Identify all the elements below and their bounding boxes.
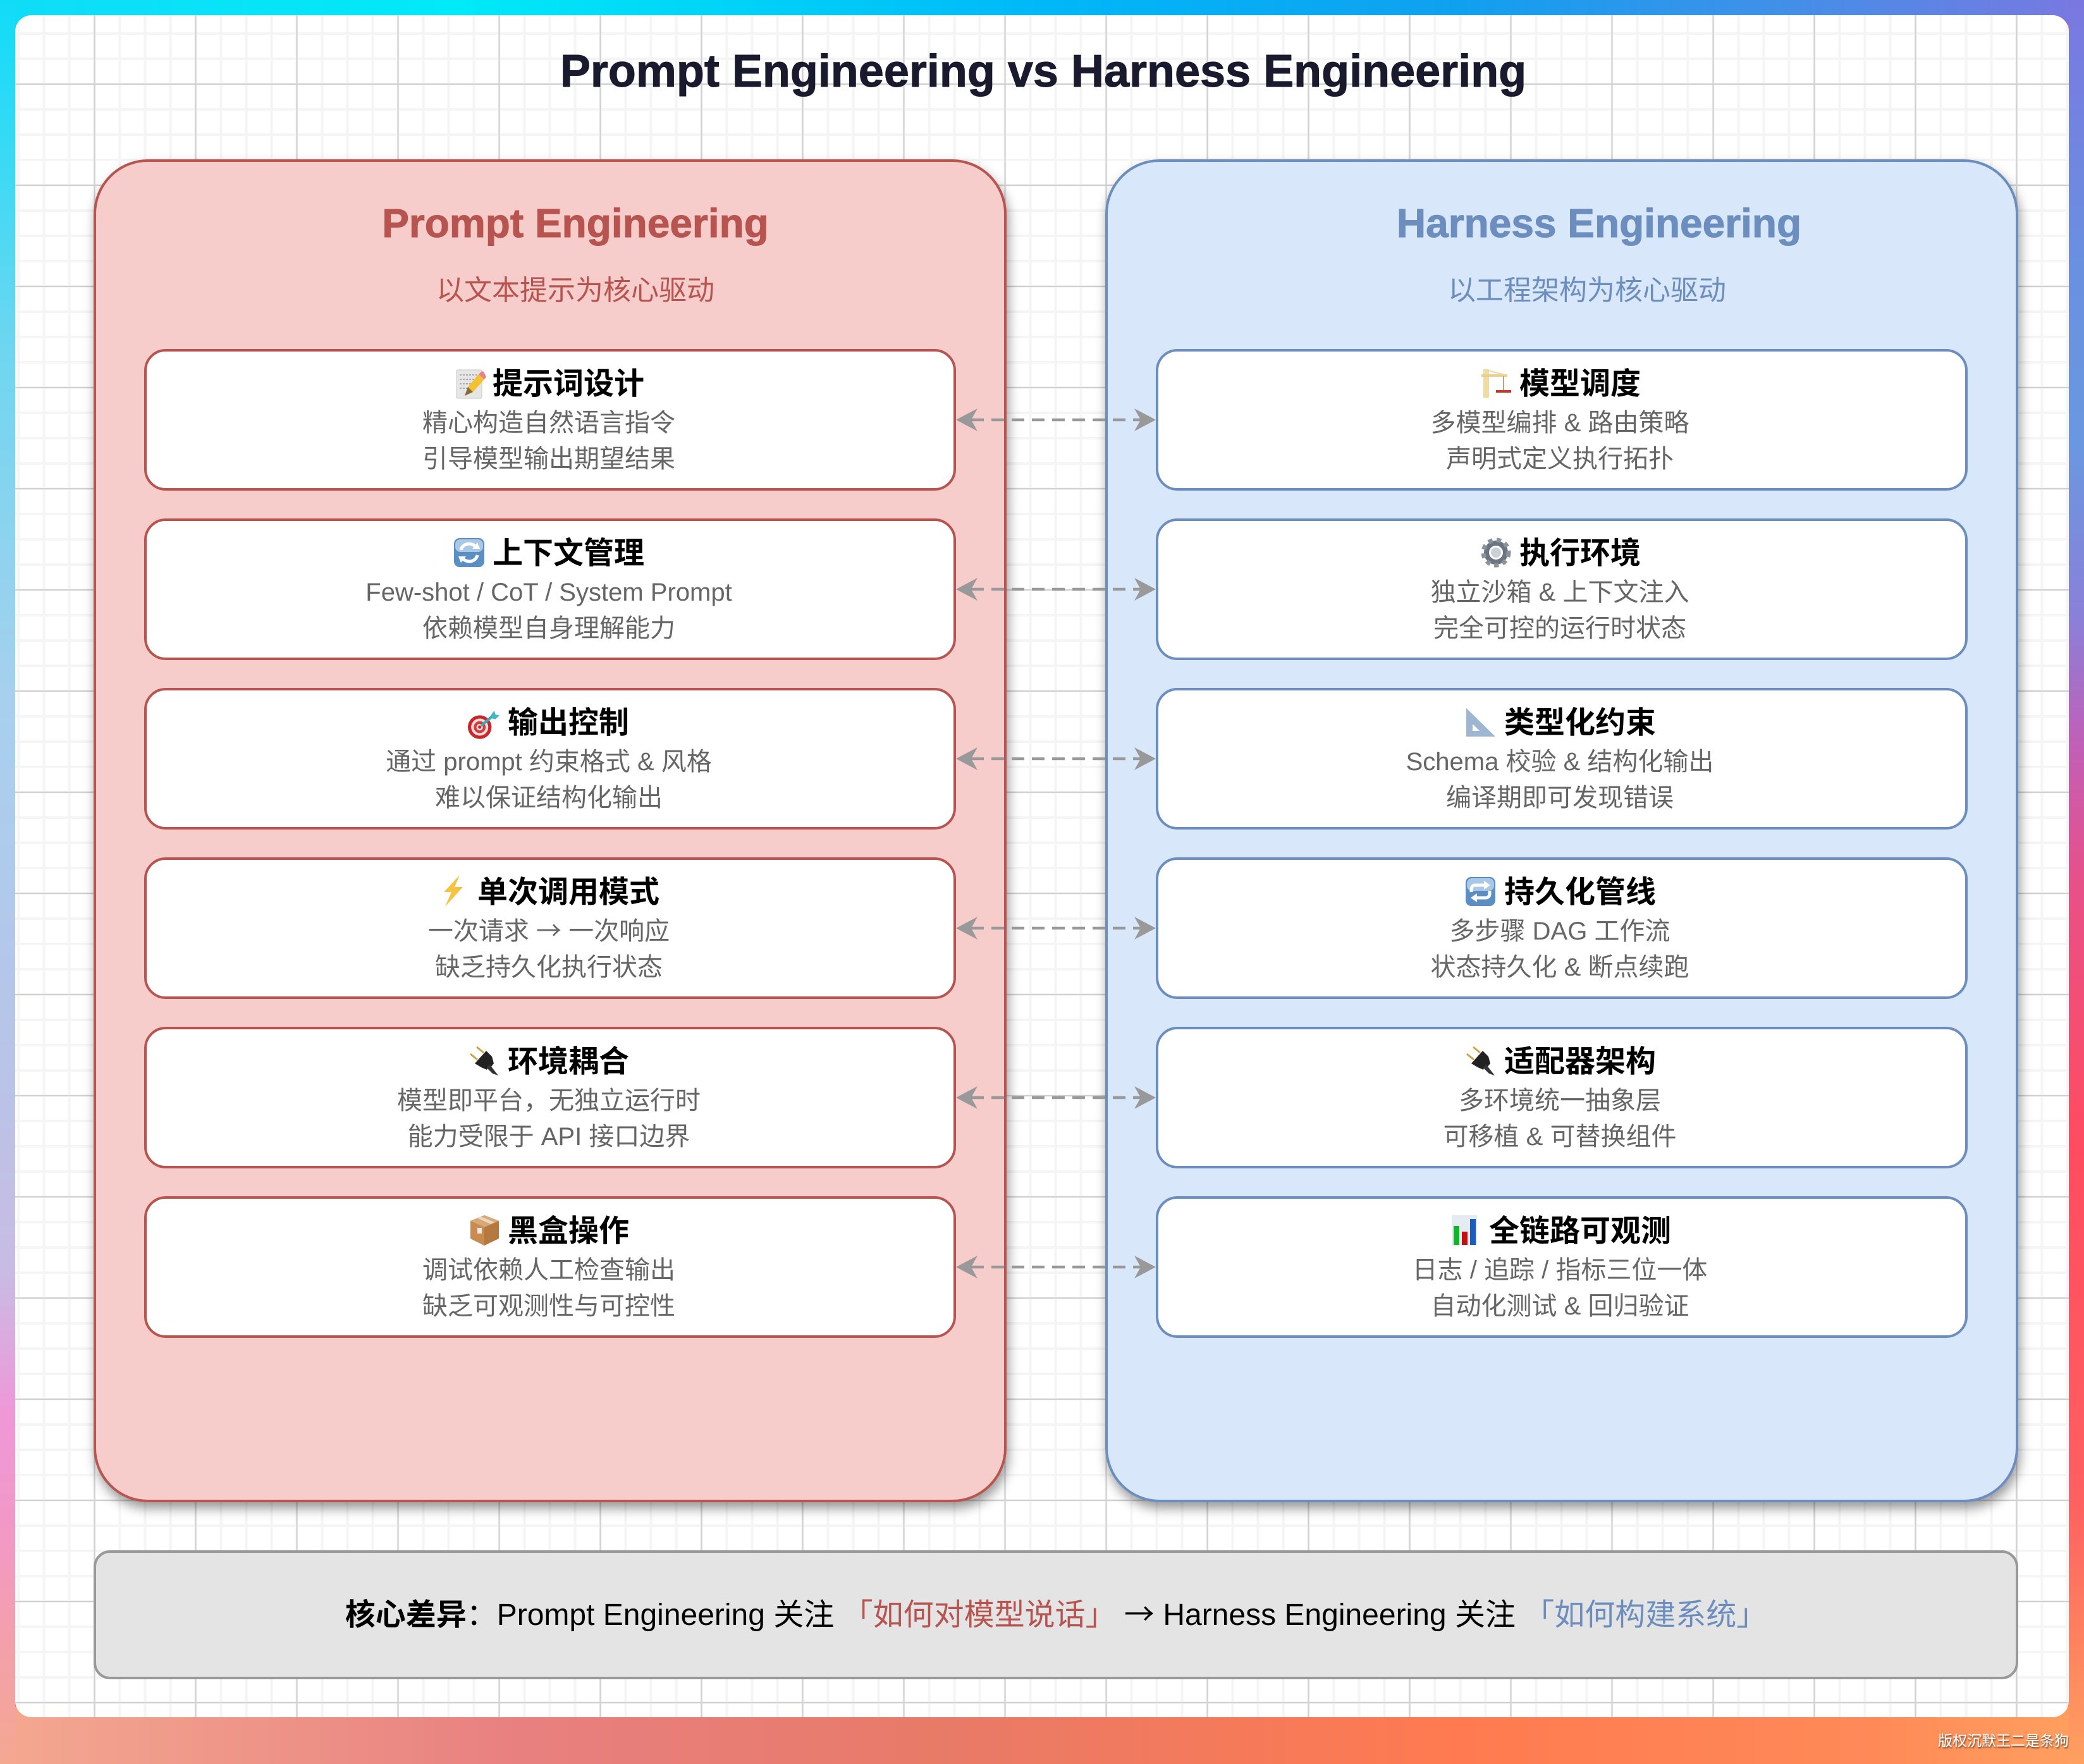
card description: [422, 409, 675, 473]
card description: 多步骤 DAG 工作流: [1450, 917, 1670, 945]
card description: [1406, 748, 1713, 812]
card description: 能力受限于 API 接口边界: [408, 1123, 690, 1151]
arrow: row 6: [956, 1256, 1156, 1278]
callout text: 核心差异：Prompt Engineering 关注 「如何对模型说话」 → Harness Engineering 关注 「如何构建系统」: [345, 1589, 1767, 1634]
card: 提示词设计: [145, 350, 955, 489]
icon: plug: [470, 1047, 498, 1075]
card description: [1443, 1087, 1676, 1151]
icon: refresh: [454, 538, 484, 567]
callout: core difference: [95, 1552, 2017, 1678]
card description: 精心构造自然语言指令: [422, 409, 675, 437]
icon: memo: [457, 370, 486, 398]
card description: 编译期即可发现错误: [1446, 784, 1674, 812]
card: 黑盒操作: [145, 1197, 955, 1337]
panel subtitle: left: 以文本提示为核心驱动: [436, 275, 714, 306]
card heading: 黑盒操作: [508, 1215, 629, 1248]
card description: 缺乏可观测性与可控性: [422, 1292, 675, 1320]
card description: [428, 910, 670, 981]
card: 上下文管理: [145, 520, 955, 659]
card description: 模型即平台，无独立运行时: [397, 1087, 701, 1115]
card: 适配器架构: [1157, 1028, 1966, 1167]
card heading: 上下文管理: [493, 537, 644, 570]
card description: 缺乏持久化执行状态: [435, 953, 663, 981]
card description: 一次请求 → 一次响应: [428, 910, 670, 947]
card description: [1431, 409, 1689, 473]
card heading: 适配器架构: [1504, 1045, 1656, 1079]
card description: 通过 prompt 约束格式 & 风格: [386, 748, 712, 776]
card description: [397, 1087, 701, 1151]
icon: bar chart: [1452, 1215, 1477, 1246]
title: Prompt Engineering vs Harness Engineering: [560, 46, 1526, 97]
icon: package: [470, 1215, 499, 1246]
card heading: 类型化约束: [1504, 706, 1656, 740]
panel subtitle: right: 以工程架构为核心驱动: [1448, 275, 1726, 306]
icon: triangle ruler: [1466, 708, 1495, 737]
card heading: 模型调度: [1519, 367, 1641, 401]
card description: 自动化测试 & 回归验证: [1431, 1292, 1689, 1320]
card description: 引导模型输出期望结果: [422, 445, 675, 473]
icon: lightning: [444, 875, 463, 907]
card description: [1431, 917, 1689, 981]
card description: 完全可控的运行时状态: [1433, 615, 1686, 642]
card description: [1431, 579, 1689, 642]
card: 输出控制: [145, 689, 955, 828]
card heading: 全链路可观测: [1489, 1215, 1671, 1248]
card description: 难以保证结构化输出: [435, 784, 663, 812]
card heading: 输出控制: [508, 706, 629, 740]
card: 环境耦合: [145, 1028, 955, 1167]
panel heading: Prompt Engineering: Prompt Engineering: [382, 200, 769, 246]
card: 持久化管线: [1157, 859, 1966, 998]
card description: [386, 748, 712, 812]
card heading: 持久化管线: [1504, 876, 1656, 909]
card: 全链路可观测: [1157, 1197, 1966, 1337]
icon: dart target: [468, 711, 500, 739]
card: 单次调用模式: [145, 859, 955, 998]
panel heading: Harness Engineering: Harness Engineering: [1397, 200, 1801, 246]
icon: plug: [1467, 1047, 1495, 1075]
icon: crane: [1481, 369, 1511, 398]
arrow: row 1: [956, 408, 1156, 431]
card heading: 环境耦合: [508, 1045, 629, 1079]
icon: repeat: [1466, 877, 1495, 906]
card description: [422, 1256, 675, 1320]
watermark: 版权沉默王二是条狗: [1938, 1732, 2069, 1749]
arrow: row 3: [956, 747, 1156, 770]
card heading: 执行环境: [1519, 537, 1641, 570]
card description: 可移植 & 可替换组件: [1443, 1123, 1676, 1151]
card description: 多模型编排 & 路由策略: [1431, 409, 1689, 437]
card description: 调试依赖人工检查输出: [422, 1256, 675, 1284]
card description: 状态持久化 & 断点续跑: [1431, 953, 1689, 981]
card: 类型化约束: [1157, 689, 1966, 828]
card: 执行环境: [1157, 520, 1966, 659]
card heading: 单次调用模式: [477, 876, 659, 909]
card description: Few-shot / CoT / System Prompt: [365, 579, 732, 606]
icon: gear: [1483, 540, 1509, 565]
card: 模型调度: [1157, 350, 1966, 489]
panel: Harness Engineering: [1106, 161, 2017, 1501]
panel: Prompt Engineering: [95, 161, 1005, 1501]
card description: [365, 579, 732, 642]
card description: [1413, 1256, 1707, 1320]
card description: Schema 校验 & 结构化输出: [1406, 748, 1713, 776]
arrow: row 4: [956, 917, 1156, 940]
card description: 独立沙箱 & 上下文注入: [1431, 579, 1689, 606]
card description: 日志 / 追踪 / 指标三位一体: [1413, 1256, 1707, 1284]
card description: 多环境统一抽象层: [1459, 1087, 1661, 1115]
card heading: 提示词设计: [493, 367, 644, 401]
card description: 依赖模型自身理解能力: [422, 615, 675, 642]
arrow: row 2: [956, 578, 1156, 601]
arrow: row 5: [956, 1086, 1156, 1109]
card description: 声明式定义执行拓扑: [1446, 445, 1674, 473]
